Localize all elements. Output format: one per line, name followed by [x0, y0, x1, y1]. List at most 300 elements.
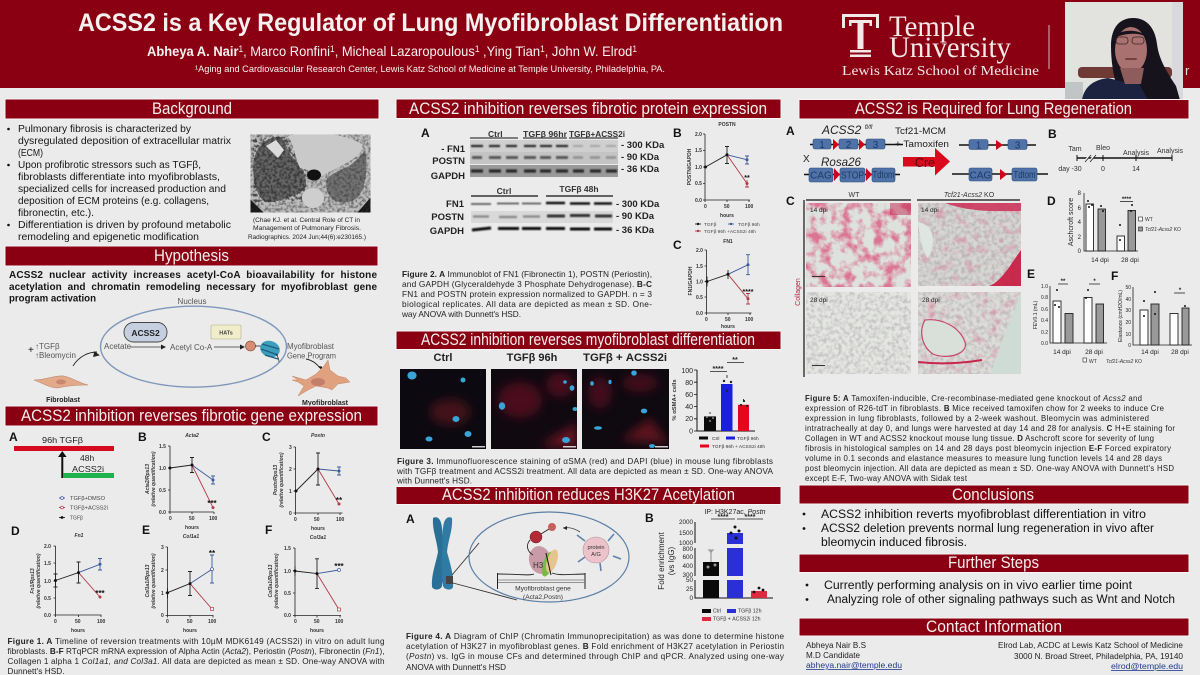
panel A timeline: ACSS2i [72, 464, 104, 474]
bar chart: alpha-SMA positive cells: TGFβ 96h + ACSS2i 48h [712, 444, 765, 450]
chart C: Postn: 100 [336, 517, 345, 523]
WT 28 dpi [806, 292, 911, 374]
KO 28 dpi: 28 dpi [922, 297, 940, 304]
chart E: FEV0.1: E [1027, 267, 1035, 281]
chart F: Col3a1: *** [334, 562, 345, 571]
bar chart: fold enrichment: 800 [682, 546, 693, 553]
conclusions list [803, 509, 1154, 549]
bar chart: alpha-SMA positive cells: **** [713, 366, 724, 373]
acetate to acetyl Co-A: Acetyl Co-A [170, 343, 213, 352]
heading: background [5, 99, 379, 119]
figure 1 caption: Collagen 1 alpha 1 Col1a1, and Col3a1. All data are depicted as mean ± SD. One-way ANOVA with [8, 657, 385, 666]
contact: Elrod Lab [998, 641, 1184, 671]
bar chart: alpha-SMA positive cells: TGFβ 96h [737, 436, 759, 442]
authors: 1 [632, 44, 637, 54]
chart E: FEV0.1: Tcf21-Acss2 KO [1106, 359, 1142, 365]
panel A: genetic strategy: 3 [1015, 140, 1021, 152]
western blot A, lower: FN1 [446, 199, 465, 210]
figure 5 caption: Figure 5: A Tamoxifen-inducible, Cre-recombinase-mediated gene knockout of Acss2 and [805, 394, 1142, 403]
heading: lung regeneration: ACSS2 is Required for Lung Regeneration [855, 100, 1132, 118]
contact: Abheya Nair: abheya.nair@temple.edu [806, 661, 902, 670]
bar chart: fold enrichment [645, 509, 773, 622]
bar chart: fold enrichment: 300 [682, 572, 693, 579]
bullet text: background: (ECM) [18, 148, 43, 159]
chart E: Col1a1: 2 [161, 568, 164, 574]
chart D: Fn1: D [11, 524, 20, 538]
figure 5 caption: volume in 0.1 seconds and elastance measures to measure lung function levels 14 and 28 days [805, 454, 1162, 463]
panel B: experimental timeline: 0 [1101, 166, 1105, 173]
figure 1 caption [8, 637, 385, 675]
bar chart: alpha-SMA positive cells: 60 [685, 392, 693, 399]
chart F: Col3a1: (relative quantification) [274, 553, 280, 609]
chart E: FEV0.1: 0.8 [1041, 295, 1048, 301]
contact: Elrod Lab: Elrod Lab, ACDC at Lewis Katz School of Medicine [998, 641, 1184, 650]
heading: protein expression: ACSS2 inhibition reverses fibrotic protein expression [409, 100, 767, 118]
bar chart: fold enrichment: Fold enrichment [657, 532, 666, 590]
legend: treatments: TGFβ+ACSS2i [70, 506, 108, 512]
western blot A, upper: - 36 KDa [621, 164, 660, 175]
heading: conclusions [799, 485, 1189, 504]
bar chart: alpha-SMA positive cells: 100 [681, 368, 693, 375]
chart B: POSTN protein: B [673, 126, 682, 140]
webcam presenter [1065, 2, 1183, 100]
ACSS2 enzyme [124, 322, 167, 342]
chart B: POSTN protein: hours [720, 213, 734, 219]
panel A: genetic strategy: STOP [841, 170, 864, 182]
title: ACSS2 is a Key Regulator of Lung Myofibroblast Differentiation [78, 9, 783, 37]
figure 5 caption: post bleomycin injection. All data are depicted as mean ± SD. One-way ANOVA with Dunnett's HSD [805, 464, 1174, 473]
legend: protein charts: TGFβ 96h +ACSS2i 48h [704, 229, 756, 235]
hypothesis statement [9, 270, 377, 304]
pathway diagram [28, 297, 350, 407]
chart E: Col1a1: (relative quantification) [151, 553, 157, 609]
chart C: Postn: 2 [289, 467, 292, 473]
fibroblast cell [34, 376, 88, 404]
authors: , Micheal Lazaropoulous [335, 43, 475, 59]
chart D: Fn1: 1.0 [44, 579, 51, 585]
image labels: Ctrl [434, 352, 452, 364]
micrograph: Ctrl [400, 369, 486, 449]
chart B: POSTN protein: POSTN [718, 122, 736, 128]
figure 5 caption: expression of R26-tdT in fibroblasts. B Mice received tamoxifen chow for 2 weeks to induce Cre [805, 404, 1164, 413]
panel A: genetic strategy: 2 [846, 140, 852, 151]
logo: Temple University: Temple [889, 10, 975, 43]
chart D: Fn1: 0 [54, 619, 57, 625]
chart D: Aschcroft score: 2 [1078, 235, 1082, 241]
chart D: Fn1: (relative quantification) [36, 553, 42, 609]
contact: Elrod Lab: 3000 N. Broad Street, Philadelphia, PA, 19140 [1014, 652, 1184, 661]
bullet text: background: remodeling and epigenetic modification [18, 232, 199, 243]
panel A: genetic strategy: X [803, 154, 810, 165]
chart C: FN1 protein [673, 238, 754, 330]
chart D: Aschcroft score: 4 [1078, 220, 1082, 226]
panel B: experimental timeline: Analysis [1157, 148, 1184, 155]
chart B: Acta2: *** [207, 499, 218, 508]
panel B: experimental timeline: B [1048, 127, 1057, 141]
bar chart: fold enrichment: B [645, 511, 654, 525]
bullet text: background: fibronectin, etc.). [18, 208, 94, 219]
heading: further steps: Further Steps [948, 554, 1039, 572]
contact: Abheya Nair: M.D Candidate [806, 651, 861, 660]
figure 1 caption: fibroblasts. B-F RTqPCR mRNA expression of Alpha Actin (Acta2), Periostin (Postn), Fibronectin (Fn1), [8, 647, 384, 656]
chart C: FN1 protein: 50 [725, 317, 731, 323]
bar chart: fold enrichment: 0 [689, 595, 693, 602]
figure 2 caption: Figure 2. A Immunoblot of FN1 (Fibronectin 1), POSTN (Periostin), [402, 269, 652, 279]
image caption [248, 217, 366, 241]
authors: 1 [475, 44, 479, 54]
image caption: Management of Pulmonary Fibrosis. [253, 225, 361, 232]
chart D: Fn1: Fn1 [75, 533, 84, 539]
heading: hypothesis: Hypothesis [154, 247, 229, 265]
stimuli: + [28, 345, 34, 356]
chart E: Col1a1 [142, 523, 217, 634]
chart D: Fn1: *** [95, 589, 106, 598]
chart C: FN1 protein: FN1/GAPDH [688, 266, 694, 295]
chart E: Col1a1: hours [183, 628, 197, 634]
fibroblast cell: Fibroblast [46, 397, 81, 404]
image labels [434, 352, 667, 364]
chart D: Fn1: 0.0 [44, 613, 51, 619]
gene program label: Gene Program [287, 352, 336, 360]
chart B: Acta2: 0.0 [159, 510, 166, 516]
chart E: FEV0.1: 0.0 [1041, 341, 1048, 347]
panel A: genetic strategy: ACSS2 [822, 123, 861, 137]
contact: Elrod Lab: elrod@temple.edu [1111, 662, 1183, 671]
KO 28 dpi [918, 292, 1021, 374]
panel: fibrotic gene expression [5, 406, 385, 675]
panel A: genetic strategy: A [786, 124, 795, 138]
western blot A, lower: Ctrl [497, 186, 511, 196]
panel: lung regeneration [786, 100, 1192, 483]
chart E: Col1a1: Col1a1/Rps13 [145, 564, 151, 597]
chart C: Postn: ** [336, 496, 343, 505]
panel: further steps [799, 554, 1189, 606]
chart C: Postn [262, 430, 345, 532]
bullet text: background [7, 124, 231, 243]
logo: Temple University [842, 10, 1190, 79]
chart B: Acta2 [138, 430, 218, 531]
figure 5 caption: Collagen in WT and ACSS2 knockout mouse lung tissue. D Aschcroft score for severity of lung [805, 434, 1154, 443]
panel A timeline: 48h [80, 453, 94, 463]
chart B: Acta2: 1.0 [159, 466, 166, 472]
chart B: POSTN protein: ** [744, 175, 750, 182]
KO 14 dpi [918, 203, 1021, 286]
chart C: FN1 protein: C [673, 238, 682, 252]
chart F: Elastance: 20 [1125, 320, 1131, 326]
figure 4 caption: Figure 4. A Diagram of ChIP (Chromatin Immunoprecipitation) as was done to determine histone [406, 632, 784, 641]
chart E: Col1a1: 0 [161, 613, 164, 619]
authors: 1 [238, 44, 243, 54]
bar chart: fold enrichment: 2000 [679, 519, 693, 526]
figure 2 caption: biological replicates. All data are depicted as mean ± SD. One- [402, 299, 652, 309]
panel B: experimental timeline [1048, 127, 1184, 173]
authors: 1 [330, 44, 335, 54]
chart E: FEV0.1 [1027, 267, 1142, 365]
chart B: POSTN protein: POSTN/GAPDH [687, 148, 693, 185]
figure 2 caption: and GAPDH (Glyceraldehyde 3 Phosphate Dehydrogenase). B-C [402, 279, 652, 289]
heading: gene expression: ACSS2 inhibition reverses fibrotic gene expression [21, 407, 362, 425]
bar chart: fold enrichment: TGFβ 12h [738, 608, 762, 614]
western blot A, lower: - 36 KDa [616, 225, 655, 236]
chart F: Elastance: 50 [1125, 285, 1131, 291]
heading: further steps [799, 554, 1189, 572]
chart F: Col3a1: Col3a1/Rps13 [268, 564, 274, 597]
chart E: FEV0.1: 0.2 [1041, 330, 1048, 336]
chart B: Acta2: 1.5 [159, 444, 166, 450]
chart F: Elastance: 40 [1125, 297, 1131, 303]
chart D: Aschcroft score: 28 dpi [1121, 257, 1139, 264]
chart B: POSTN protein: 1.0 [695, 165, 702, 171]
figure 3 caption: Figure 3. Immunofluorescence staining of αSMA (red) and DAPI (blue) in mouse lung fibroblasts [397, 457, 773, 466]
chart F: Elastance: 0 [1128, 343, 1131, 349]
chart D: Aschcroft score [1047, 191, 1181, 264]
chart E: FEV0.1: WT [1089, 359, 1097, 365]
chart F: Col3a1: 100 [335, 619, 344, 625]
chart C: FN1 protein: 0.5 [696, 295, 703, 301]
chart F: Col3a1: F [265, 523, 272, 537]
legend: treatments: TGFβ+DMSO [70, 496, 105, 502]
chart B: Acta2: 0 [169, 516, 172, 522]
chart D: Fn1 [11, 524, 106, 634]
bar chart: fold enrichment: 25 [686, 586, 693, 593]
WT 28 dpi: 28 dpi [810, 297, 828, 304]
bar chart: alpha-SMA positive cells: % αSMA+ cells [672, 379, 678, 421]
figure 1 caption: Figure 1. A Timeline of reversion treatments with 10µM MDK6149 (ACSS2i) in vitro on adult lung [8, 637, 385, 646]
protein A/G bead [577, 534, 621, 571]
panel B: experimental timeline: day -30 [1058, 166, 1082, 173]
panel A: genetic strategy: Tdtom [872, 170, 894, 181]
KO 14 dpi: 14 dpi [921, 207, 939, 214]
further steps list: Currently performing analysis on in vivo earlier time point [824, 580, 1133, 592]
heading: contact information [799, 618, 1189, 636]
panel C: histology: C [786, 194, 795, 208]
chart B: Acta2: hours [185, 525, 199, 531]
bar chart: fold enrichment: (vs IgG) [667, 546, 676, 575]
chart B: POSTN protein: 50 [724, 204, 730, 210]
western blot A, lower [430, 184, 660, 237]
chart E: Col1a1: 3 [161, 545, 164, 551]
gene track [498, 573, 585, 601]
western blot A, lower: - 90 KDa [616, 211, 655, 222]
chart D: Aschcroft score: 8 [1078, 191, 1082, 197]
chart C: FN1 protein: 1.5 [696, 264, 703, 270]
logo: Temple University: University [889, 31, 1011, 64]
chart E: FEV0.1: 1.0 [1041, 284, 1048, 290]
authors: , Marco Ronfini [243, 43, 330, 59]
panel A: genetic strategy: Tcf21-MCM [895, 126, 946, 137]
conclusions list: ACSS2 deletion prevents normal lung regeneration in vivo after [821, 523, 1154, 535]
bar chart: fold enrichment: TGFβ + ACSS2i 12h [713, 616, 761, 622]
myofibroblast cell: Myofibroblast [302, 400, 349, 407]
legend: protein charts [695, 222, 760, 235]
figure 2 caption: FN1 and POSTN protein expression normalized to GAPDH. n = 3 [402, 289, 652, 299]
gene program label: Myofibroblast [287, 342, 335, 351]
heading: myofibroblast differentiation: ACSS2 inhibition reverses myofibroblast differentiation [421, 331, 755, 349]
chart C: Postn: 0 [294, 517, 297, 523]
panel: contact information [799, 618, 1189, 671]
nucleus [100, 297, 286, 387]
panel A: genetic strategy: fl/fl [865, 125, 873, 131]
western blot A, upper: - 300 KDa [621, 140, 665, 151]
western blot A, lower: TGFβ 48h [559, 184, 599, 194]
figure 5 caption: intratracheally at day 0, and lungs were harvested at day 14 and 28 for analysis. C H+E staining for [805, 424, 1175, 433]
chart E: FEV0.1: 0.4 [1041, 318, 1048, 324]
chart F: Col3a1: hours [310, 628, 324, 634]
chart F: Elastance: * [1179, 288, 1182, 294]
legend: treatments: TGFβ [70, 516, 83, 522]
chart D: Aschcroft score: 14 dpi [1091, 257, 1109, 264]
bar chart: fold enrichment: Ctrl [713, 608, 721, 614]
bar chart: alpha-SMA positive cells: 80 [685, 380, 693, 387]
figure 4 caption: (Postn) vs. IgG in mouse CFs and determined through ChIP and qPCR. Analyzed using one-way [406, 652, 785, 661]
western blot A, upper: TGFβ 96hr [523, 129, 568, 139]
authors: , John W. Elrod [545, 43, 632, 59]
further steps list [806, 580, 1175, 606]
panel A timeline [9, 430, 114, 478]
chart D: Fn1: Fn1/Rps13 [30, 568, 36, 594]
panel A: genetic strategy [786, 123, 1048, 182]
legend: protein charts: TGFβ [704, 222, 717, 228]
western blot A, upper: POSTN [432, 156, 465, 167]
heading: conclusions: Conclusions [952, 486, 1034, 504]
chart C: Postn: 50 [314, 517, 320, 523]
western blot A, upper: - 90 KDa [621, 152, 660, 163]
western blot A, lower: POSTN [431, 212, 464, 223]
figure 3 caption: with TGFβ treatment and ACSS2i treatment. All data are depicted as mean ± SD. One-way ANOVA [396, 467, 774, 476]
chart C: FN1 protein: 0.0 [696, 311, 703, 317]
chart C: FN1 protein: 2.0 [696, 248, 703, 254]
chart D: Aschcroft score: WT [1145, 217, 1153, 223]
chart D: Fn1: 2.0 [44, 544, 51, 550]
figure 5 caption: fibrosis in histological samples on 14 and 28 days post bleomycin injection E-F Forced expiratory [805, 444, 1171, 453]
chart D: Aschcroft score: D [1047, 194, 1056, 208]
heading: H3K27 acetylation: ACSS2 inhibition reduces H3K27 Acetylation [442, 486, 735, 504]
contact: Abheya Nair: Abheya Nair B.S [806, 641, 866, 650]
hypothesis statement: acetylation and chromatin remodeling necessary for myofibroblast gene [9, 282, 377, 293]
western blot A, upper: TGFβ+ACSS2i [569, 129, 625, 139]
stimuli: ↑TGFβ [35, 342, 60, 351]
chart B: POSTN protein [673, 122, 754, 219]
chart E: Col1a1: ** [209, 549, 216, 558]
chart D: Fn1: 50 [75, 619, 81, 625]
western blot A, upper: - FN1 [441, 144, 466, 155]
heading: background: Background [152, 100, 232, 118]
chart B: POSTN protein: 0.0 [695, 198, 702, 204]
chart C: Postn: 3 [289, 445, 292, 451]
image caption: (Chae KJ. et al. Central Role of CT in [253, 217, 361, 224]
chart C: Postn: Postn [311, 433, 325, 439]
panel A: genetic strategy: + Tamoxifen [895, 139, 949, 150]
chart E: FEV0.1: * [1093, 279, 1096, 285]
affiliation: ¹Aging and Cardiovascular Research Center, Lewis Katz School of Medicine at Temple University, Philadelphia, PA. [195, 64, 665, 75]
bar chart: fold enrichment: 1500 [679, 530, 693, 537]
conclusions list: bleomycin induced fibrosis. [821, 537, 967, 549]
figure 5 caption [805, 394, 1175, 483]
nucleosome [526, 523, 580, 578]
nucleosome [246, 338, 282, 362]
zoom ellipse [469, 512, 629, 602]
panel: fibrotic protein expression [396, 99, 781, 330]
chart D: Aschcroft score: Aschcroft score [1068, 198, 1075, 246]
chart C: FN1 protein: **** [743, 289, 754, 296]
bar chart: fold enrichment: 400 [682, 563, 693, 570]
panel A: genetic strategy: CAG [810, 170, 832, 182]
panel: background [5, 99, 379, 243]
chart E: Col1a1: 0 [166, 619, 169, 625]
chart B: POSTN protein: 0 [704, 204, 707, 210]
ChIP diagram [406, 512, 629, 602]
bar chart: fold enrichment: 600 [682, 554, 693, 561]
bar chart: fold enrichment: **** [718, 514, 729, 521]
chart D: Aschcroft score: Tcf21-Acss2 KO [1145, 227, 1181, 233]
chart D: Fn1: 0.5 [44, 596, 51, 602]
chart E: Col1a1: 50 [187, 619, 193, 625]
conclusions list: ACSS2 inhibition reverts myofibroblast differentiation in vitro [821, 509, 1146, 521]
chart C: Postn: (relative quantification) [279, 452, 285, 508]
image caption: Radiographics. 2024 Jun;44(6):e230165.) [248, 234, 366, 241]
legend: protein charts: TGFβ 96h [738, 222, 760, 228]
chart F: Elastance: Elastance (cmH2O/mL) [1118, 290, 1124, 342]
authors: ,Ying Tian [479, 43, 540, 59]
chart F: Elastance: 28 dpi [1171, 349, 1189, 356]
gene track: (Acta2,Postn) [523, 594, 563, 601]
panel C: histology: Collagen [795, 278, 802, 306]
protein A/G bead: A/G [591, 552, 601, 558]
figure 3 caption [396, 457, 774, 486]
chart F: Col3a1: 0.0 [284, 613, 291, 619]
chart B: Acta2: 0.5 [159, 488, 166, 494]
stimuli [28, 342, 100, 366]
heading: contact information: Contact Information [926, 618, 1062, 636]
panel B: experimental timeline: Analysis [1123, 150, 1150, 157]
bullet text: background: specialized cells for increased production and [18, 184, 226, 195]
stimuli: ↑Bleomycin [35, 351, 76, 360]
bar chart: alpha-SMA positive cells [672, 357, 765, 450]
bar chart: fold enrichment: 50 [686, 577, 693, 584]
panel A: genetic strategy: 3 [873, 140, 879, 151]
Cre arrow: Cre [915, 156, 935, 170]
myofibroblast cell [292, 360, 350, 407]
western blot A, lower: GAPDH [430, 226, 464, 237]
chart B: Acta2: 50 [189, 516, 195, 522]
hypothesis statement: ACSS2 nuclear activity increases acetyl-CoA bioavailability for histone [9, 270, 377, 281]
HATs box [211, 325, 241, 339]
chart F: Elastance: 30 [1125, 308, 1131, 314]
western blot A, upper: GAPDH [431, 171, 465, 182]
chart D: Aschcroft score: 0 [1078, 249, 1082, 255]
western blot A, upper: Ctrl [488, 129, 503, 139]
chart C: Postn: C [262, 430, 271, 444]
hypothesis statement: program activation [9, 294, 96, 304]
chart E: Col1a1: 1 [161, 591, 164, 597]
bar chart: alpha-SMA positive cells: 20 [685, 416, 693, 423]
chart F: Elastance: 10 [1125, 332, 1131, 338]
gene track: Myofibroblast gene [515, 586, 571, 592]
chart D: Fn1: 1.5 [44, 561, 51, 567]
western blot A, upper: A [421, 126, 430, 140]
chart E: FEV0.1: 0.6 [1041, 307, 1048, 313]
chart D: Aschcroft score: 6 [1078, 206, 1082, 212]
bar chart: alpha-SMA positive cells: Ctrl [712, 436, 719, 442]
chart E: FEV0.1: FEV0.1 (mL) [1033, 300, 1039, 329]
chart E: Col1a1: 100 [208, 619, 217, 625]
logo: Temple University: Lewis Katz School of Medicine [842, 64, 1039, 79]
chart F: Elastance: F [1111, 269, 1118, 283]
image labels: TGFβ 96h [507, 352, 558, 364]
panel B: experimental timeline: Bleo [1096, 145, 1110, 152]
panel C: histology: Tcf21-Acss2 KO [944, 192, 995, 199]
bar chart: fold enrichment: **** [745, 514, 756, 521]
